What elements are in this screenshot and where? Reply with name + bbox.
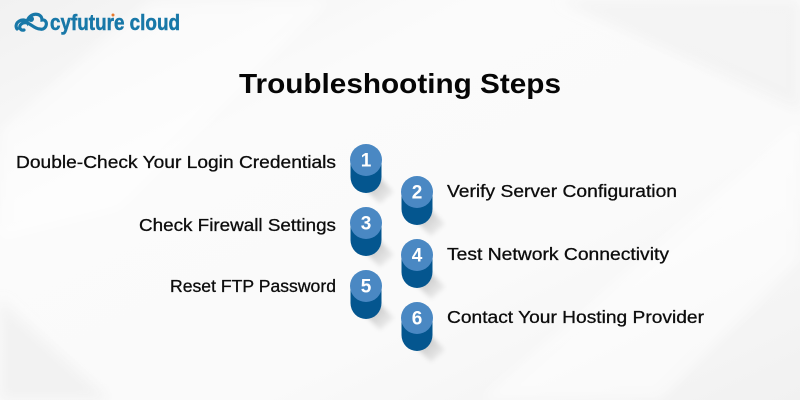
logo wordmark: cyfuture cloud xyxy=(50,10,180,35)
step 4 label: Test Network Connectivity xyxy=(447,244,669,264)
step 3 number: 3 xyxy=(361,214,371,234)
step 2 label: Verify Server Configuration xyxy=(447,181,677,201)
step 2 xyxy=(401,176,677,236)
step 6 cylinder xyxy=(401,302,445,362)
step 1 xyxy=(16,144,394,204)
icon: cloud xyxy=(16,14,46,30)
step 4 cylinder xyxy=(401,239,445,299)
logo: cyfuture cloud xyxy=(16,10,180,35)
step 3 xyxy=(139,207,394,267)
step 4 xyxy=(401,239,669,299)
title: Troubleshooting Steps xyxy=(239,68,561,99)
step 5 xyxy=(170,270,394,330)
step 2 cylinder xyxy=(401,176,445,236)
step 2 number: 2 xyxy=(412,182,422,204)
logo dot xyxy=(112,14,114,16)
step 6 xyxy=(401,302,704,362)
step 5 cylinder xyxy=(350,270,394,330)
step 1 label: Double-Check Your Login Credentials xyxy=(16,152,336,172)
step 4 number: 4 xyxy=(412,246,423,266)
step 1 cylinder xyxy=(350,144,394,204)
step 6 label: Contact Your Hosting Provider xyxy=(447,307,704,327)
step 1 number: 1 xyxy=(361,150,372,172)
step 6 number: 6 xyxy=(412,308,422,330)
step 3 cylinder xyxy=(350,207,394,267)
step 3 label: Check Firewall Settings xyxy=(139,215,336,235)
step 5 number: 5 xyxy=(361,276,372,298)
step 5 label: Reset FTP Password xyxy=(170,276,336,296)
